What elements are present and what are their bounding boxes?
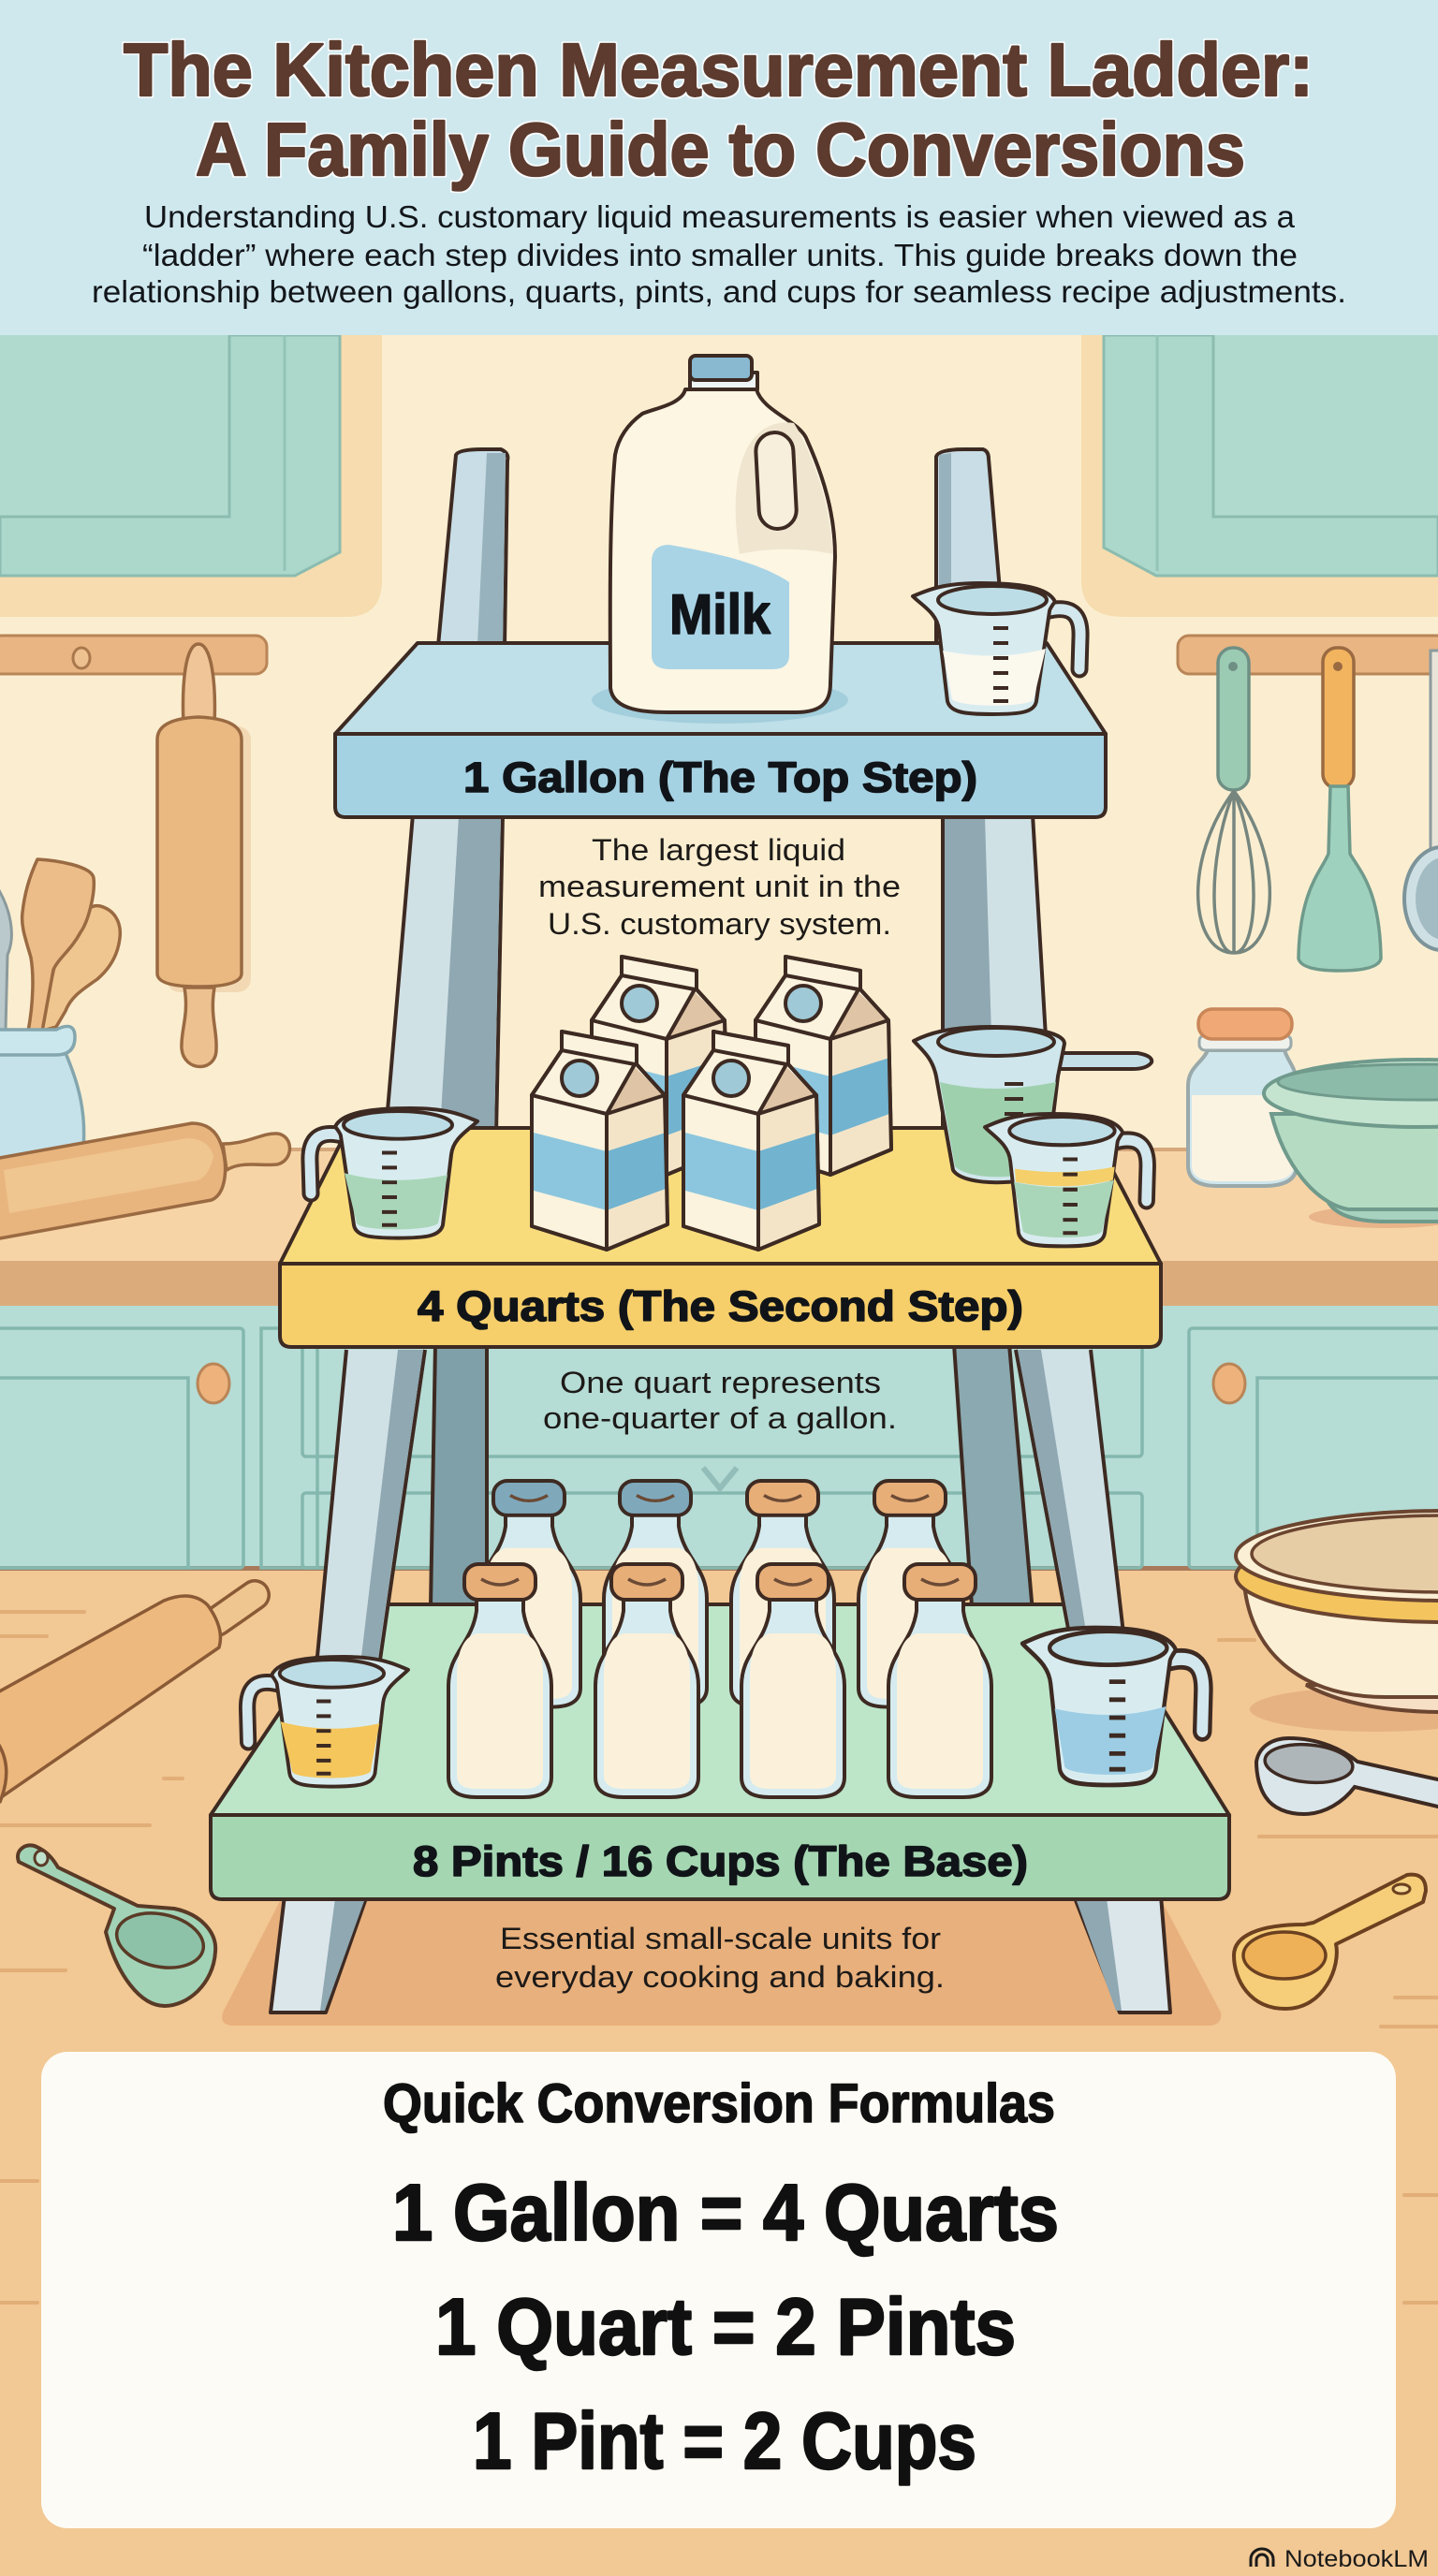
arrow: down chevron	[703, 1468, 737, 1488]
utensil rack right	[1178, 636, 1438, 674]
text: second step description: one-quarter of a gallon.	[543, 1401, 897, 1435]
icon: gray measuring spoon	[1256, 1738, 1438, 1814]
utensil rack left	[0, 636, 267, 674]
icon: rolling pin on counter	[0, 1123, 290, 1239]
intro paragraph: Understanding U.S. customary liquid measurements is easier when viewed as a	[144, 199, 1296, 234]
icon: hanging rolling pin	[157, 644, 251, 1067]
logo: NotebookLM: NotebookLM	[1284, 2546, 1429, 2572]
icon: front row pint bottles	[448, 1564, 991, 1797]
formula: pint: 1 Pint = 2 Cups	[473, 2397, 976, 2486]
ladder: middle outer legs	[316, 1350, 1123, 1666]
icon: back row pint bottles	[477, 1481, 961, 1707]
icon: measuring cup, base right	[1022, 1628, 1203, 1785]
text: base step description: everyday cooking and baking.	[495, 1960, 945, 1994]
intro paragraph: relationship between gallons, quarts, pints, and cups for seamless recipe adjustments.	[92, 274, 1346, 309]
label: 8 Pints: 8 Pints / 16 Cups (The Base)	[413, 1837, 1028, 1885]
icon: measuring cup, base left	[247, 1657, 408, 1787]
ladder: upper legs	[386, 814, 1051, 1133]
formula: quart: 1 Quart = 2 Pints	[435, 2283, 1016, 2372]
lower cabinets	[0, 1328, 1438, 1568]
icon: spatula	[1299, 648, 1381, 971]
text: Milk: Milk	[669, 583, 771, 646]
text: top step description: U.S. customary system.	[548, 907, 891, 941]
text: base step description	[495, 1922, 945, 1994]
icon: saucepan-style measuring cup, second step back	[914, 1027, 1152, 1182]
ladder: lower legs	[271, 1895, 1170, 2012]
icon: crock with wooden spoons	[0, 859, 120, 1161]
icon: ladle at edge	[1404, 651, 1438, 950]
title	[124, 28, 1313, 191]
panel: top step	[335, 643, 1106, 817]
intro paragraph: “ladder” where each step divides into smaller units. This guide breaks down the	[142, 238, 1298, 272]
text: base step description: Essential small-scale units for	[500, 1922, 941, 1955]
text: top step description: The largest liquid	[592, 833, 845, 867]
table wood streaks	[0, 1612, 1438, 2303]
heading: formulas: Quick Conversion Formulas	[383, 2073, 1055, 2134]
icon: whisk	[1198, 648, 1269, 953]
title: The Kitchen Measurement Ladder:	[124, 28, 1313, 111]
panel: header	[0, 0, 1438, 335]
panel: quick conversion formulas	[41, 2052, 1396, 2528]
text: second step description	[543, 1366, 897, 1435]
icon: cream mixing bowl	[1236, 1511, 1438, 1732]
icon: milk jug	[592, 356, 848, 724]
icon: green mixing bowl	[1264, 1060, 1438, 1228]
icon: measuring cup, top step	[913, 583, 1080, 714]
icon: orange measuring spoon	[1234, 1875, 1426, 2009]
formula: gallon: 1 Gallon = 4 Quarts	[392, 2169, 1059, 2258]
text: top step description	[538, 833, 901, 941]
upper cabinet left	[0, 329, 382, 617]
upper cabinet right	[1081, 329, 1438, 617]
icon: milk cartons	[532, 957, 891, 1250]
icon: rolling pin on table	[0, 1595, 255, 1802]
ladder: top posts	[438, 449, 1005, 646]
text: top step description: measurement unit in the	[538, 870, 901, 903]
text: second step description: One quart represents	[560, 1366, 881, 1399]
panel: second step	[280, 1128, 1161, 1347]
intro paragraph	[92, 199, 1346, 309]
ladder: inner rear posts	[431, 1344, 1034, 1633]
panel: base step	[211, 1604, 1229, 1899]
cabinet knobs	[198, 1364, 1245, 1403]
icon: green measuring spoon	[18, 1845, 215, 2006]
label: 1 Gallon: 1 Gallon (The Top Step)	[463, 754, 977, 801]
icon: jar of milk	[1188, 1009, 1297, 1186]
title: A Family Guide to Conversions	[196, 108, 1245, 191]
icon: measuring cup, second step right	[985, 1114, 1148, 1246]
label: 4 Quarts: 4 Quarts (The Second Step)	[418, 1282, 1023, 1330]
ladder floor shadow	[222, 1899, 1221, 2026]
icon: measuring cup, second step left	[310, 1108, 477, 1238]
